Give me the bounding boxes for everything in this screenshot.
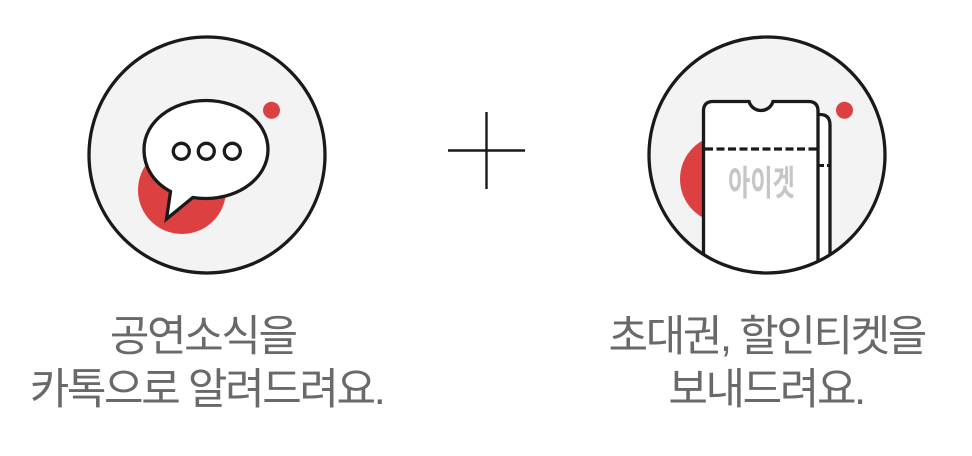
icon: speech bubble badge bbox=[89, 37, 325, 273]
small red dot bbox=[836, 102, 853, 119]
red accent circle bbox=[680, 135, 768, 223]
back ticket bbox=[820, 112, 832, 258]
ticket logo text: 아이겟 bbox=[728, 164, 795, 204]
circle outline bbox=[649, 37, 885, 273]
red accent circle bbox=[138, 146, 226, 234]
caption: left: 공연소식을 bbox=[110, 313, 296, 361]
small red dot bbox=[263, 102, 280, 119]
icon: ticket badge bbox=[649, 37, 885, 290]
caption: right: 초대권, 할인티켓을 bbox=[609, 313, 926, 361]
front ticket bbox=[704, 102, 818, 290]
speech bubble bbox=[144, 100, 268, 219]
plus sign bbox=[448, 112, 525, 189]
caption: right: 보내드려요. bbox=[668, 366, 864, 414]
three dots bbox=[173, 143, 240, 159]
caption: left: 카톡으로 알려드려요. bbox=[30, 366, 383, 414]
